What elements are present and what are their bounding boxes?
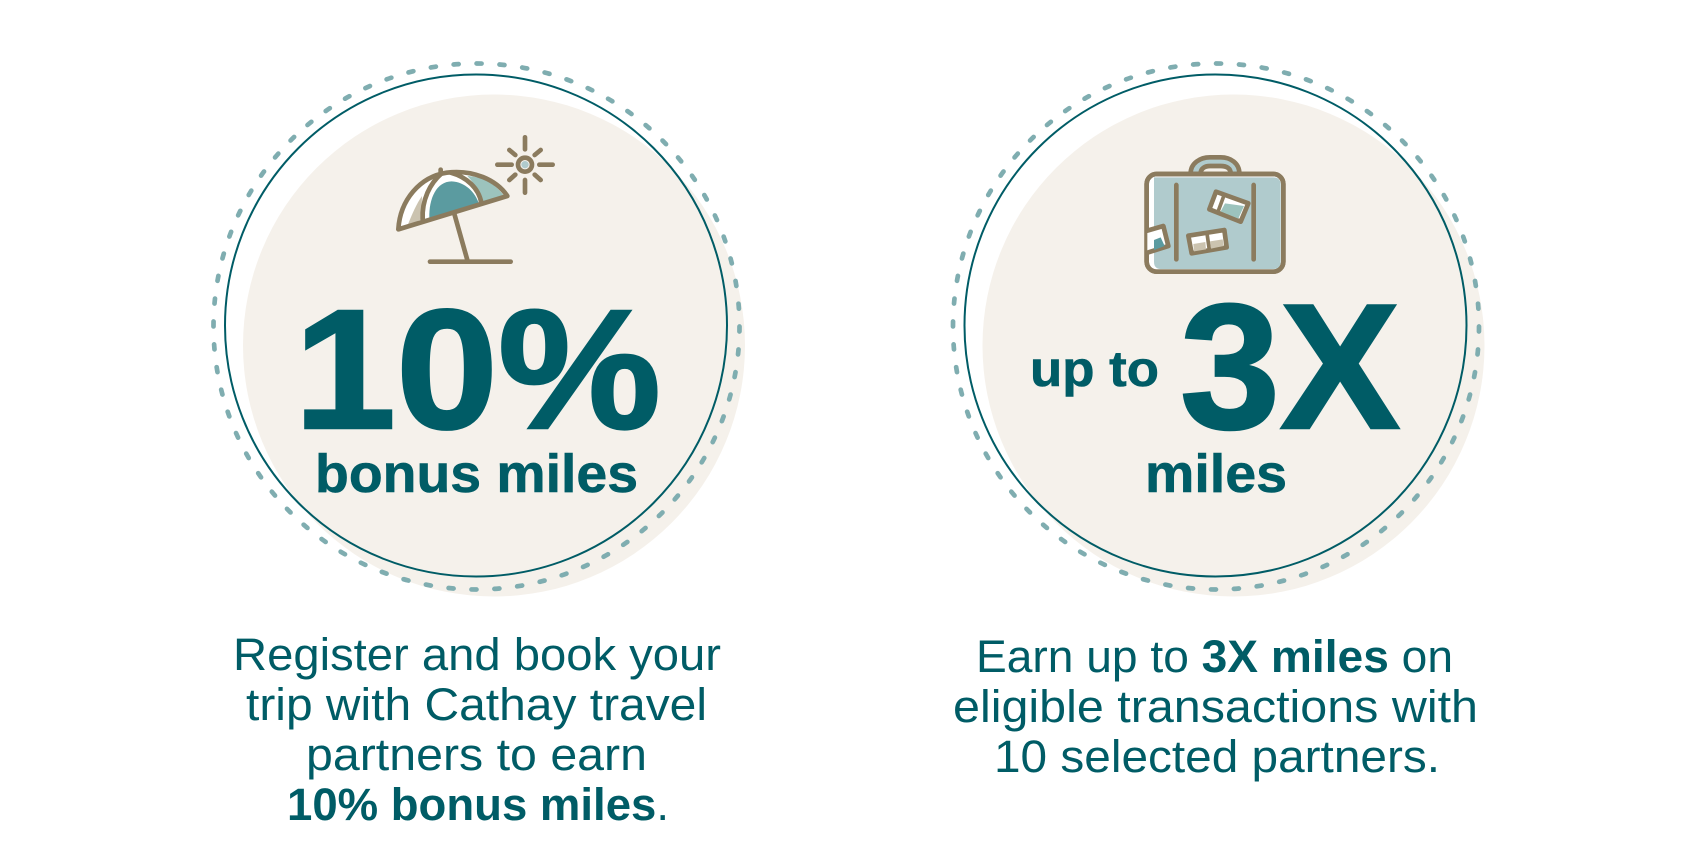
icon: beach umbrella and sun (398, 137, 553, 262)
description text: Earn up to 3X miles on (976, 631, 1453, 682)
badge label: up to: up to (1030, 341, 1159, 397)
badge: thin ring (964, 74, 1466, 576)
description text: 10% bonus miles. (287, 779, 669, 830)
badge: dashed ring (214, 64, 740, 590)
big number: 10% (294, 275, 661, 465)
badge: beige disc (243, 94, 745, 596)
badge label: bonus miles (315, 444, 638, 504)
big number: 3X (1180, 267, 1400, 466)
badge: dashed ring (953, 64, 1479, 590)
description text: trip with Cathay travel (246, 679, 707, 730)
description text: partners to earn (306, 729, 647, 780)
description text (953, 631, 1478, 782)
description text: 10 selected partners. (994, 731, 1440, 782)
badge: thin ring (225, 74, 727, 576)
panel: up to 3X miles (953, 64, 1484, 782)
panel: 10% bonus miles (214, 64, 745, 830)
icon: suitcase with stickers (1147, 157, 1283, 272)
description text: Register and book your (233, 629, 721, 680)
description text (233, 629, 721, 830)
badge label: miles: miles (1145, 444, 1287, 504)
description text: eligible transactions with (953, 681, 1478, 732)
badge: beige disc (982, 94, 1484, 596)
